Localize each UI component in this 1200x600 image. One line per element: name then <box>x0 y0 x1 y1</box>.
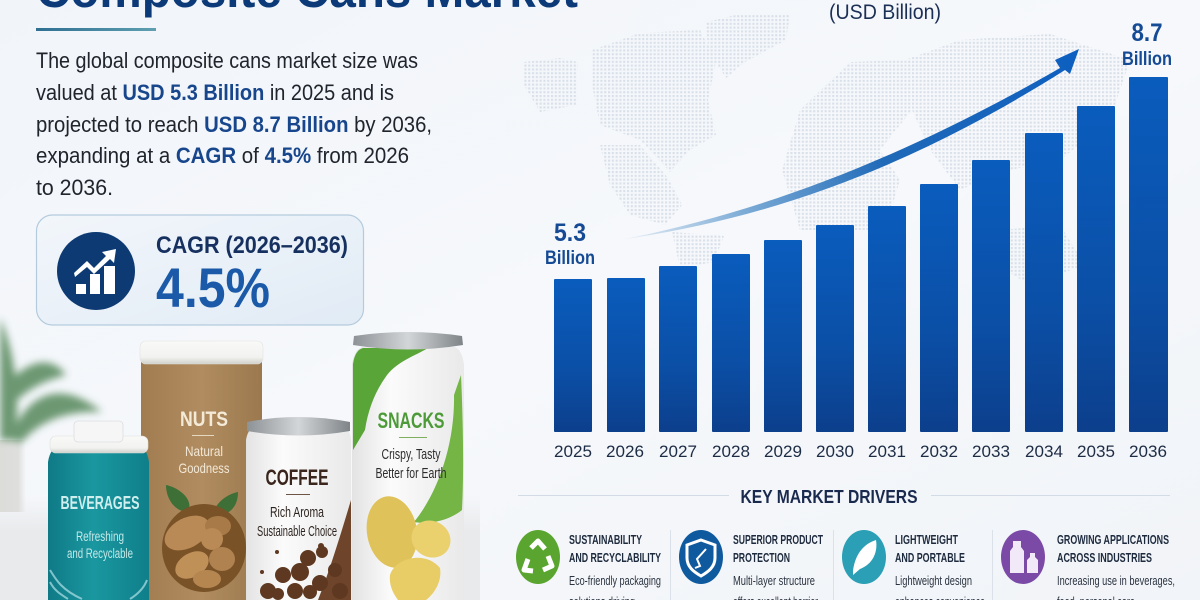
can: beverages: and Recyclable <box>67 546 133 561</box>
driver: sustainability: Eco-friendly packaging <box>569 573 661 588</box>
x axis year labels: 2027 <box>659 442 697 461</box>
blurred photo backdrop: table and plant <box>0 318 480 600</box>
x axis year labels: 2025 <box>554 442 592 461</box>
intro paragraph: expanding at a CAGR of 4.5% from 2026 <box>36 143 409 168</box>
end value label: Billion <box>1122 49 1172 70</box>
dotted world map <box>524 14 1130 285</box>
driver: lightweight: LIGHTWEIGHT <box>895 533 958 547</box>
can: nuts: NUTS <box>180 408 228 431</box>
CAGR callout <box>36 215 364 325</box>
can: snacks <box>352 332 464 600</box>
driver: sustainability <box>516 530 661 600</box>
can: snacks: Crispy, Tasty <box>382 446 441 463</box>
intro paragraph: projected to reach USD 8.7 Billion by 2036, <box>36 112 432 137</box>
x axis year labels: 2032 <box>920 442 958 461</box>
icon: bottles <box>1010 541 1038 573</box>
x axis year labels: 2030 <box>816 442 854 461</box>
can: beverages: BEVERAGES <box>60 492 140 513</box>
driver: product protection: Multi-layer structure <box>733 573 815 588</box>
driver: lightweight <box>842 530 985 600</box>
title underline <box>36 28 156 31</box>
can: nuts: Natural <box>185 443 223 459</box>
can: snacks: SNACKS <box>378 408 444 433</box>
CAGR callout: 4.5% <box>156 256 270 319</box>
start value label: Billion <box>545 248 595 269</box>
intro paragraph: The global composite cans market size was <box>36 48 418 73</box>
can: coffee: Rich Aroma <box>270 505 325 521</box>
x axis year labels: 2034 <box>1025 442 1063 461</box>
x axis year labels: 2028 <box>712 442 750 461</box>
start value label <box>545 219 595 269</box>
can: coffee: COFFEE <box>266 465 328 490</box>
growth arrow <box>625 49 1079 239</box>
x axis year labels: 2029 <box>764 442 802 461</box>
can: coffee: Sustainable Choice <box>257 524 337 540</box>
intro paragraph: to 2036. <box>36 175 113 200</box>
intro paragraph: valued at USD 5.3 Billion in 2025 and is <box>36 80 394 105</box>
x axis year labels: 2035 <box>1077 442 1115 461</box>
driver: product protection: SUPERIOR PRODUCT <box>733 533 823 547</box>
driver: product protection: PROTECTION <box>733 551 790 565</box>
icon: recycle <box>524 541 552 571</box>
can: beverages <box>48 421 149 600</box>
icon: feather <box>853 540 876 575</box>
intro paragraph <box>36 48 432 200</box>
driver: lightweight: Lightweight design <box>895 573 972 588</box>
driver: sustainability: AND RECYCLABILITY <box>569 551 661 565</box>
bar chart <box>554 77 1168 432</box>
end value label: 8.7 <box>1132 19 1162 47</box>
x axis year labels: 2026 <box>606 442 644 461</box>
driver: product protection <box>679 530 823 600</box>
can: snacks: Better for Earth <box>376 465 446 482</box>
driver: growing applications: ACROSS INDUSTRIES <box>1057 551 1152 565</box>
section heading: key market drivers: KEY MARKET DRIVERS <box>740 486 918 507</box>
start value label: 5.3 <box>554 219 586 247</box>
x axis year labels: 2031 <box>868 442 906 461</box>
icon: shield <box>687 540 715 576</box>
driver: lightweight: AND PORTABLE <box>895 551 965 565</box>
can: nuts: Goodness <box>178 460 230 476</box>
chart subtitle: (USD Billion) <box>829 0 941 24</box>
x axis year labels <box>554 442 1167 461</box>
x axis year labels: 2036 <box>1129 442 1167 461</box>
can: coffee <box>246 417 351 600</box>
driver: growing applications <box>1001 530 1175 600</box>
can: beverages: Refreshing <box>76 529 124 544</box>
icon: growth chart <box>74 249 116 294</box>
driver: sustainability: SUSTAINABILITY <box>569 533 642 547</box>
end value label <box>1122 19 1172 70</box>
can: nuts <box>140 341 263 600</box>
CAGR callout: CAGR (2026–2036) <box>156 232 348 259</box>
x axis year labels: 2033 <box>972 442 1010 461</box>
